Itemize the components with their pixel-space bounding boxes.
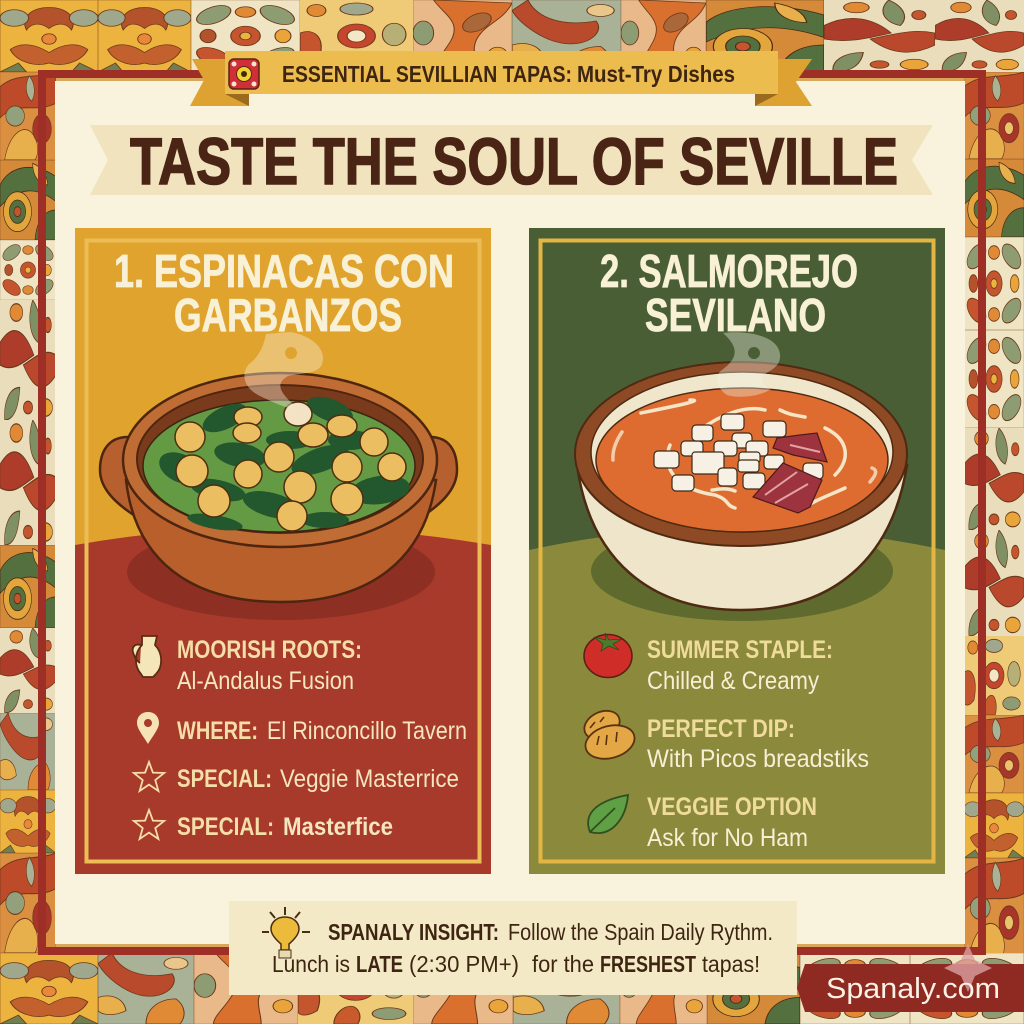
insight text: (2:30 PM+) <box>409 951 519 977</box>
icon: jug <box>133 636 161 677</box>
fact: where <box>137 712 467 745</box>
fact: summer staple: SUMMER STAPLE: <box>647 636 833 664</box>
illustration: clay dish with spinach and chickpeas <box>100 332 457 620</box>
icon: bread <box>580 705 638 764</box>
fact: veggie option <box>588 793 817 852</box>
dish heading: 2. SALMOREJO <box>600 245 858 297</box>
insight text: tapas! <box>702 951 760 977</box>
icon: tomato <box>584 633 632 678</box>
insight text: Lunch is <box>272 951 350 977</box>
fact: where: WHERE: <box>177 717 258 745</box>
red frame <box>42 74 982 951</box>
fact: special masterfice <box>134 810 393 841</box>
croutons <box>654 414 823 491</box>
fact: summer staple: Chilled & Creamy <box>647 667 819 695</box>
panel: espinacas con garbanzos <box>75 228 491 874</box>
illustration: bowl of salmorejo <box>575 332 907 621</box>
dish heading: SEVILANO <box>645 289 826 341</box>
fact: perfect dip: With Picos breadstiks <box>647 745 869 773</box>
fact: special masterfice: SPECIAL: <box>177 813 274 841</box>
fact: veggie option: Ask for No Ham <box>647 824 808 852</box>
dish heading <box>600 245 858 341</box>
dish heading: 1. ESPINACAS CON <box>114 245 454 297</box>
insight text <box>272 919 773 977</box>
brand name: Spanaly.com <box>826 973 1000 1005</box>
insight box <box>229 901 797 995</box>
fact: moorish roots: MOORISH ROOTS: <box>177 636 362 664</box>
fact: special veggie: Veggie Masterrice <box>280 765 459 793</box>
ribbon heading: ESSENTIAL SEVILLIAN TAPAS: <box>282 61 572 87</box>
panel: salmorejo sevilano <box>529 228 945 874</box>
ribbon heading: Must-Try Dishes <box>577 61 735 87</box>
icon: tile emblem <box>229 59 259 89</box>
icon: lightbulb <box>262 907 310 958</box>
insight text: SPANALY INSIGHT: <box>328 919 499 945</box>
insight text: Follow the Spain Daily Rythm. <box>508 919 773 945</box>
icon: map pin <box>137 712 159 744</box>
steam <box>717 332 780 397</box>
fact: where: El Rinconcillo Tavern <box>267 717 467 745</box>
icon: star <box>134 810 164 839</box>
fact: perfect dip <box>580 705 869 773</box>
fact: special veggie: SPECIAL: <box>177 765 272 793</box>
dish heading <box>114 245 454 341</box>
fact: special masterfice: Masterfice <box>283 813 393 841</box>
title banner <box>90 124 933 198</box>
spinach leaves <box>154 391 412 534</box>
icon: leaf <box>588 795 628 833</box>
fact: summer staple <box>584 633 833 695</box>
ham <box>753 433 827 513</box>
steam <box>244 332 323 410</box>
dish heading: GARBANZOS <box>174 289 402 341</box>
chickpeas <box>175 402 406 531</box>
brand badge <box>797 944 1024 1012</box>
insight text: for the <box>532 951 594 977</box>
insight text: LATE <box>356 951 403 977</box>
fact: moorish roots <box>133 636 362 695</box>
insight text: FRESHEST <box>600 951 696 977</box>
fact: special veggie <box>134 762 459 793</box>
cream swirl <box>613 400 876 510</box>
fact: perfect dip: PERFECT DIP: <box>647 715 795 743</box>
cream content panel <box>55 81 965 944</box>
top ribbon <box>190 51 812 106</box>
icon: star <box>134 762 164 791</box>
fact: moorish roots: Al-Andalus Fusion <box>177 667 354 695</box>
fact: veggie option: VEGGIE OPTION <box>647 793 817 821</box>
